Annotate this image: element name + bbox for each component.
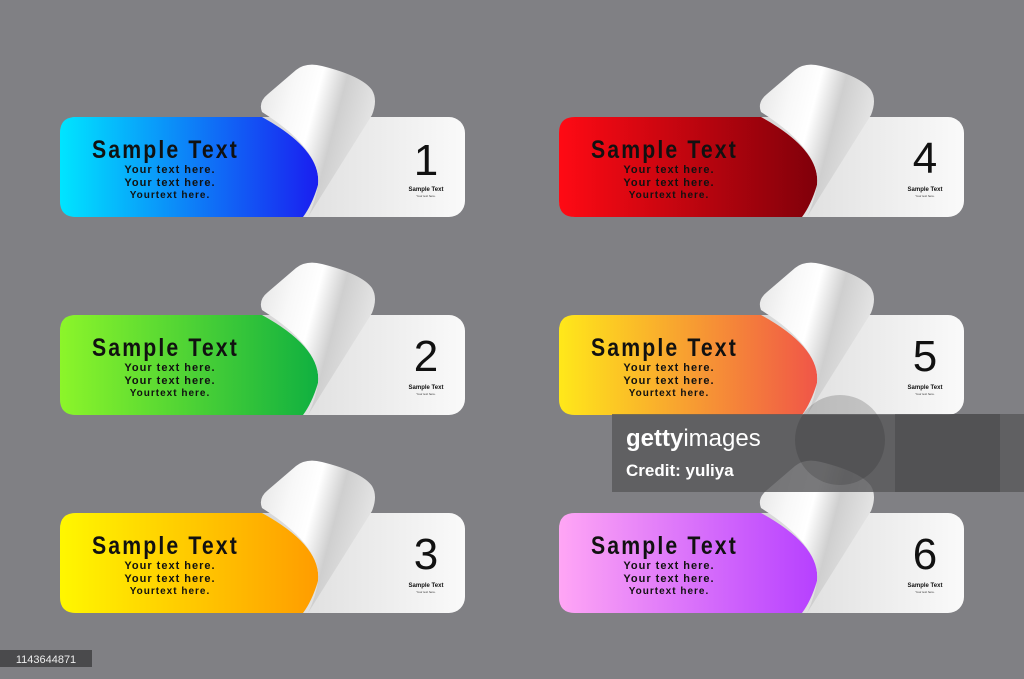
label 3 xyxy=(60,461,465,613)
label 1: Yourtext here. xyxy=(130,190,210,201)
label 6: Sample Text xyxy=(591,531,738,559)
label 1: Sample Text xyxy=(409,187,443,193)
image id xyxy=(0,650,92,667)
label 4: Your text here. xyxy=(623,177,715,189)
label 5: Your text here. xyxy=(623,375,715,387)
label 5: 5 xyxy=(913,332,937,381)
label 1: Sample Text xyxy=(92,135,239,163)
label 3: Your text here. xyxy=(124,573,216,585)
label 5: Sample Text xyxy=(908,385,942,391)
label 1 xyxy=(60,65,465,217)
label 1: Your text here. xyxy=(124,164,216,176)
label 6: Sample Text xyxy=(908,583,942,589)
label 1: Your text here. xyxy=(416,194,436,198)
watermark: gettyimages xyxy=(626,425,761,452)
label 6: Your text here. xyxy=(915,590,935,594)
label 4: Your text here. xyxy=(915,194,935,198)
label 4 xyxy=(559,65,964,217)
label 3: Your text here. xyxy=(124,560,216,572)
label 3: Sample Text xyxy=(92,531,239,559)
label 5: Your text here. xyxy=(623,362,715,374)
label 1: 1 xyxy=(414,136,438,185)
label 5: Sample Text xyxy=(591,333,738,361)
label 1: Your text here. xyxy=(124,177,216,189)
label 2: Your text here. xyxy=(124,375,216,387)
label 4: 4 xyxy=(913,134,937,183)
label 2 xyxy=(60,263,465,415)
label 4: Sample Text xyxy=(591,135,738,163)
label 4: Sample Text xyxy=(908,187,942,193)
label 2: 2 xyxy=(414,332,438,381)
label 2: Sample Text xyxy=(92,333,239,361)
label 6 xyxy=(559,461,964,613)
label 6: Your text here. xyxy=(623,560,715,572)
label 6: Yourtext here. xyxy=(629,586,709,597)
label 6: Your text here. xyxy=(623,573,715,585)
label 5: Your text here. xyxy=(915,392,935,396)
label 3: Your text here. xyxy=(416,590,436,594)
image id: 1143644871 xyxy=(16,654,76,666)
label 6: 6 xyxy=(913,530,937,579)
label 2: Sample Text xyxy=(409,385,443,391)
label 4: Yourtext here. xyxy=(629,190,709,201)
label 4: Your text here. xyxy=(623,164,715,176)
label 2: Your text here. xyxy=(124,362,216,374)
label 3: 3 xyxy=(414,530,438,579)
label 3: Sample Text xyxy=(409,583,443,589)
label 5: Yourtext here. xyxy=(629,388,709,399)
label 2: Yourtext here. xyxy=(130,388,210,399)
label 5 xyxy=(559,263,964,415)
watermark: Credit: yuliya xyxy=(626,461,734,480)
watermark xyxy=(612,395,1024,492)
label 3: Yourtext here. xyxy=(130,586,210,597)
label 2: Your text here. xyxy=(416,392,436,396)
